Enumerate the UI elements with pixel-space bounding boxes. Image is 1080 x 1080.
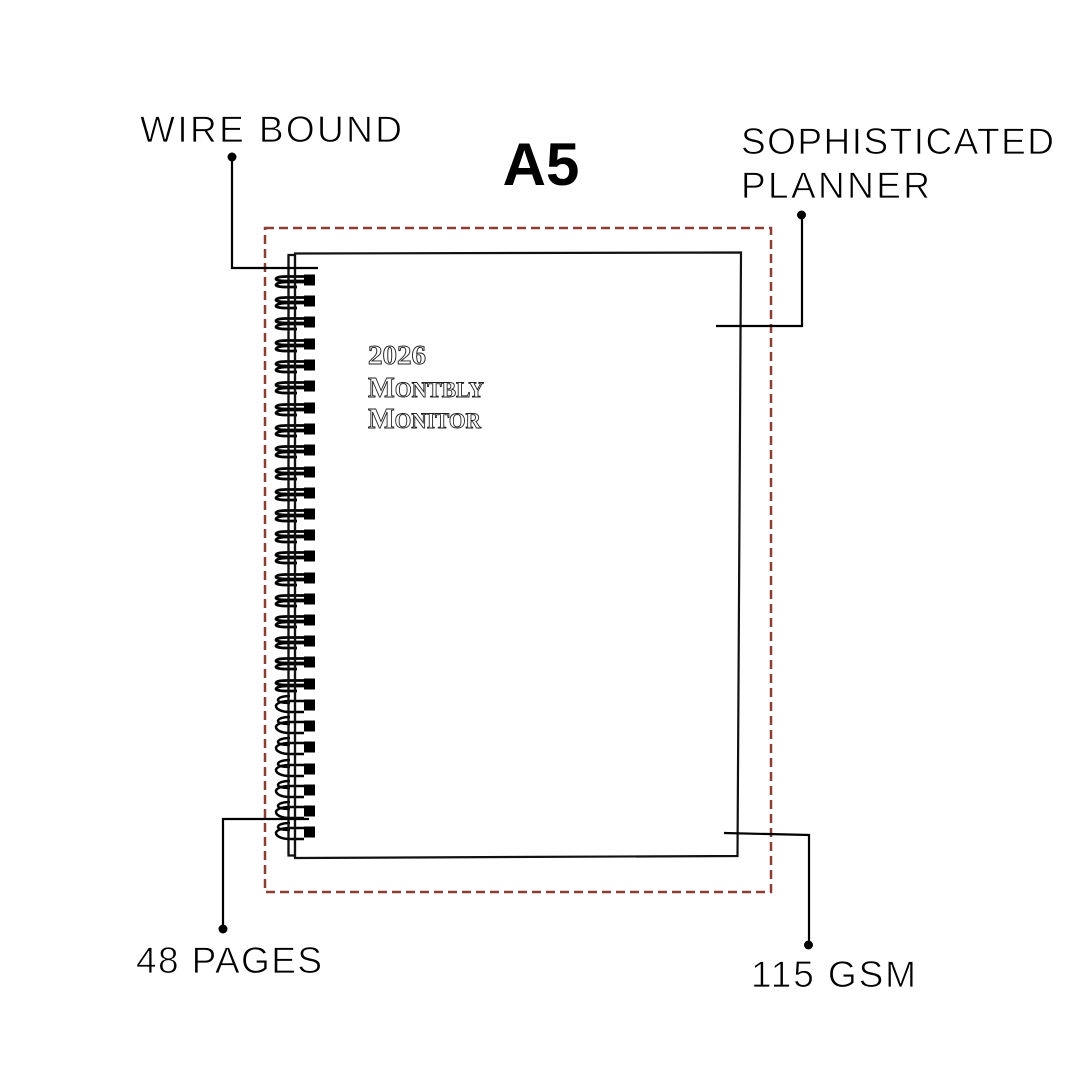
- label: SOPHISTICATED: [741, 121, 1054, 162]
- callout: 115 gsm: [724, 833, 916, 995]
- cover title: MONTBLY: [368, 372, 484, 404]
- notebook cover outline: [295, 252, 741, 858]
- leader line: [724, 833, 809, 945]
- leader line: [716, 215, 802, 326]
- label: 48 PAGES: [136, 940, 322, 981]
- callout: sophisticated planner: PLANNER: [741, 165, 930, 206]
- leader line: [232, 157, 318, 268]
- notebook illustration: [276, 252, 741, 858]
- callout: sophisticated planner: [716, 121, 1054, 326]
- spiral wire binding: [276, 274, 315, 839]
- dashed trim border: [265, 228, 771, 892]
- heading: A5: A5: [503, 131, 579, 198]
- cover title: [368, 340, 484, 435]
- spine lines over rings: [288, 254, 295, 858]
- label: WIRE BOUND: [140, 109, 402, 150]
- callout: wire bound: [140, 109, 402, 268]
- callout: 48 pages: [136, 819, 322, 981]
- label: 115 GSM: [751, 954, 916, 995]
- cover title: MONITOR: [368, 403, 482, 435]
- leader line: [223, 819, 309, 929]
- cover title: 2026: [368, 340, 426, 370]
- notebook spine back page: [288, 255, 295, 856]
